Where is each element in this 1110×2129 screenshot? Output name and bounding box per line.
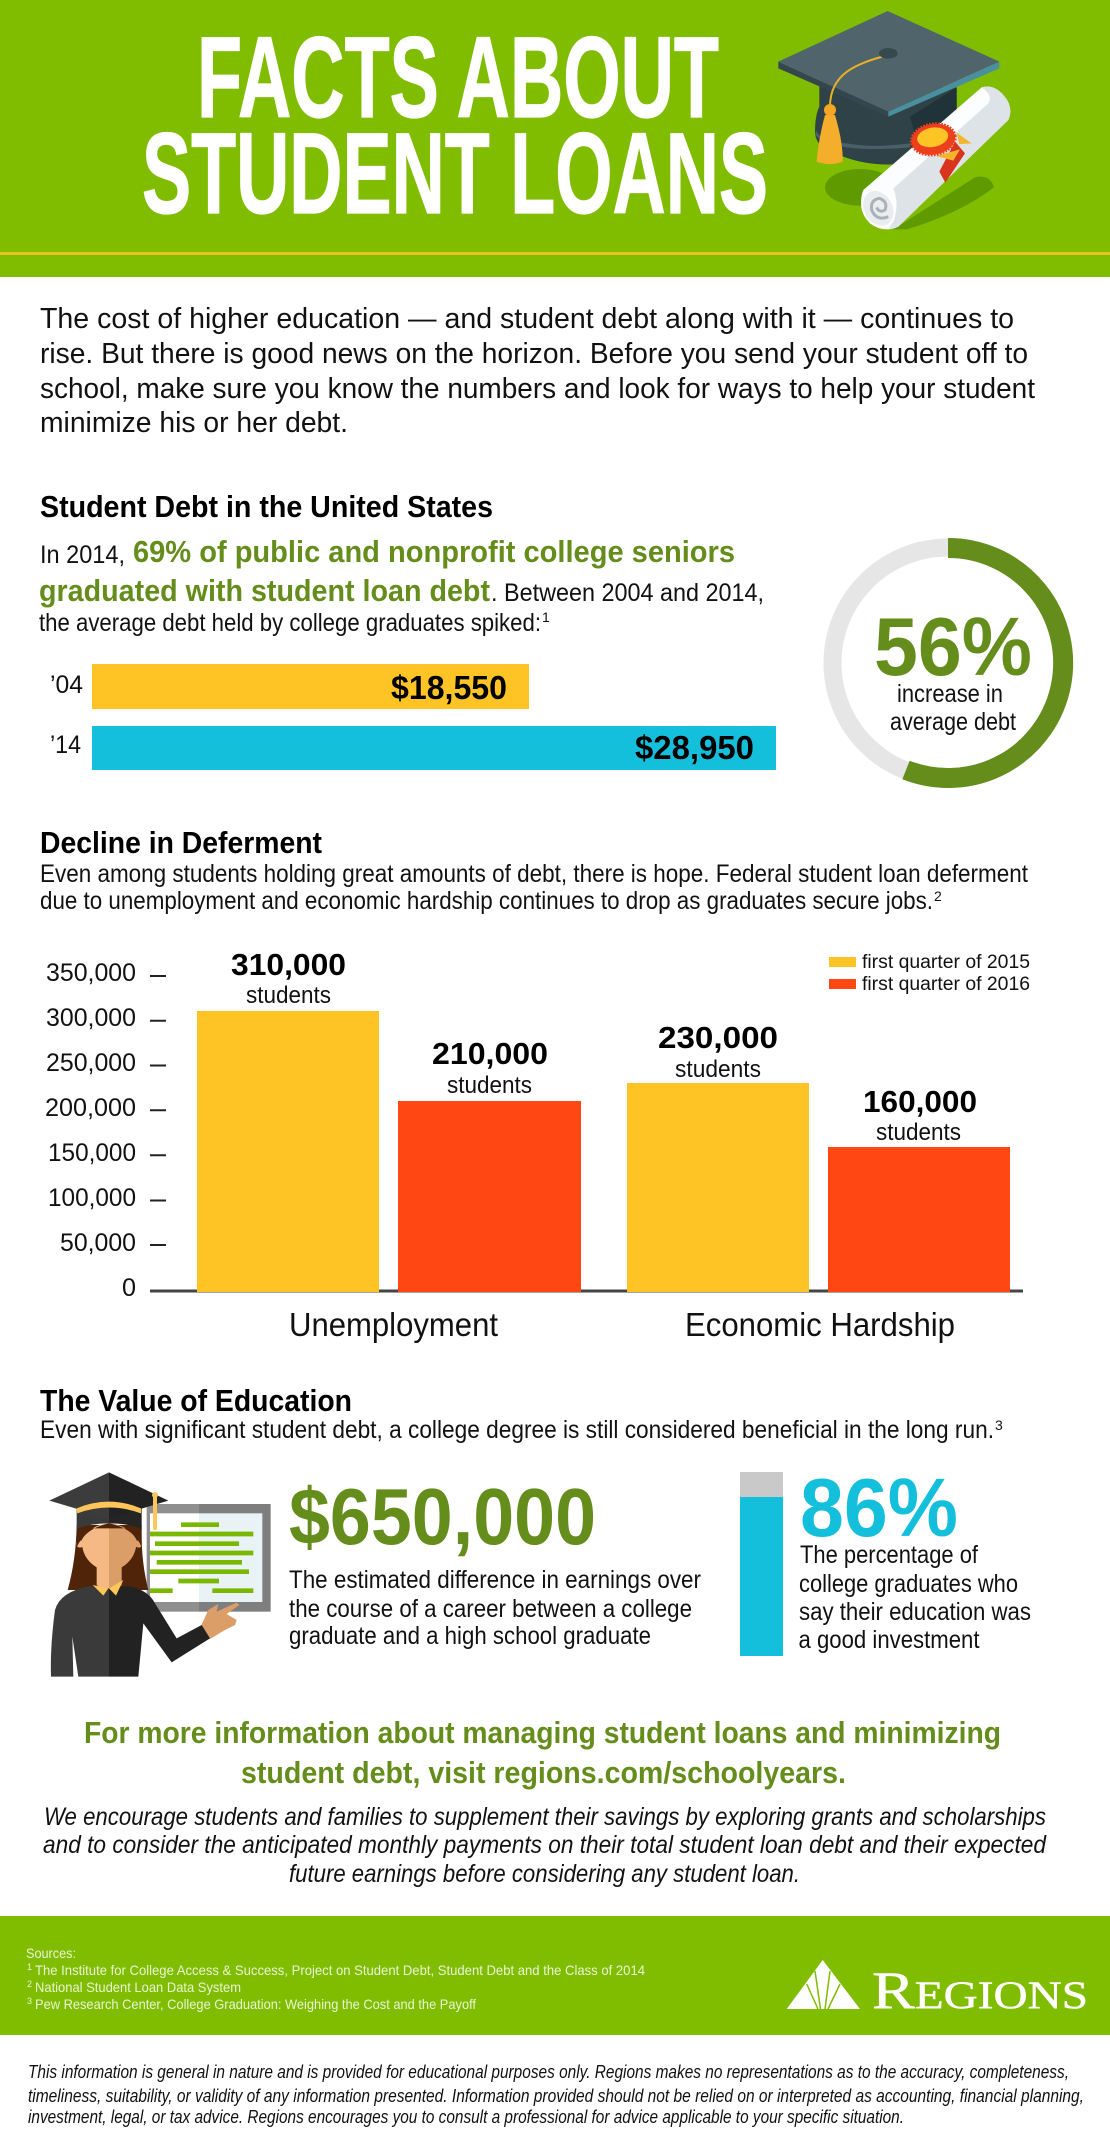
logo: Regions: REGIONS bbox=[872, 1962, 1088, 2020]
bar: 2004 debt: $18,550 bbox=[391, 669, 507, 706]
sources: 2 bbox=[27, 1979, 32, 1989]
donut: 56% increase: increase in bbox=[897, 680, 1003, 708]
stat: 86% bbox=[798, 1461, 1031, 1654]
bar: 2014 debt: ’14 bbox=[50, 731, 81, 759]
donut: 56% increase bbox=[832, 548, 1064, 778]
bar: unemployment 2016 bbox=[398, 1036, 581, 1292]
student debt text block: 69% of public and nonprofit college seniors bbox=[133, 534, 735, 569]
y axis labels and ticks: 100,000 bbox=[48, 1184, 136, 1212]
bar chart: deferment bbox=[45, 947, 1030, 1343]
title bbox=[142, 14, 768, 238]
progress bar: 86% bbox=[740, 1472, 783, 1656]
bar: unemployment 2016: students bbox=[447, 1072, 532, 1099]
intro paragraph: minimize his or her debt. bbox=[40, 407, 348, 439]
deferment text block: due to unemployment and economic hardship continues to drop as graduates secure jobs. bbox=[40, 887, 933, 915]
sources: National Student Loan Data System bbox=[35, 1979, 241, 1995]
deferment text block bbox=[40, 860, 1028, 915]
legend: first quarter of 2015 bbox=[862, 952, 1030, 973]
bar: hardship 2015 bbox=[627, 1020, 809, 1292]
disclaimer bbox=[28, 2062, 1084, 2127]
intro paragraph: The cost of higher education — and student debt along with it — continues to bbox=[40, 303, 1014, 335]
bar: unemployment 2015: 310,000 bbox=[231, 947, 346, 982]
student debt text block: In 2014, bbox=[40, 541, 125, 569]
legend bbox=[829, 952, 1030, 995]
stat: 86%: 86% bbox=[800, 1461, 958, 1554]
bar: unemployment 2016: 210,000 bbox=[432, 1036, 548, 1071]
y axis labels and ticks: 150,000 bbox=[48, 1139, 136, 1167]
y axis labels and ticks: 350,000 bbox=[46, 959, 136, 987]
call to action: student debt, visit regions.com/schoolyears. bbox=[241, 1755, 846, 1790]
stat: $650,000 bbox=[289, 1472, 701, 1650]
stat: 86%: a good investment bbox=[798, 1626, 980, 1654]
stat: 86%: The percentage of bbox=[800, 1541, 978, 1569]
icon: graduate with board bbox=[49, 1472, 271, 1677]
heading: decline in deferment: Decline in Deferment bbox=[40, 825, 322, 860]
intro paragraph bbox=[40, 303, 1035, 439]
bar: hardship 2015: students bbox=[675, 1056, 761, 1083]
bar: unemployment 2015 bbox=[197, 947, 379, 1292]
category labels: Unemployment bbox=[289, 1306, 498, 1343]
y axis labels and ticks bbox=[45, 959, 166, 1302]
bar: 2014 debt: $28,950 bbox=[635, 729, 754, 766]
student debt text block: . Between 2004 and 2014, bbox=[491, 579, 764, 607]
bar: hardship 2016 bbox=[828, 1084, 1010, 1292]
sources: The Institute for College Access & Success, Project on Student Debt, Student Debt and the Class of 2014 bbox=[35, 1962, 645, 1978]
sources bbox=[26, 1945, 645, 2012]
student debt text block: graduated with student loan debt bbox=[39, 573, 490, 608]
donut: 56% increase: average debt bbox=[890, 708, 1016, 736]
header banner bbox=[0, 0, 1110, 277]
intro paragraph: rise. But there is good news on the horizon. Before you send your student off to bbox=[40, 338, 1028, 370]
sources: Sources: bbox=[26, 1945, 76, 1961]
intro paragraph: school, make sure you know the numbers and look for ways to help your student bbox=[40, 373, 1035, 405]
y axis labels and ticks: 300,000 bbox=[46, 1004, 136, 1032]
title: STUDENT LOANS bbox=[142, 110, 768, 238]
y axis labels and ticks: 0 bbox=[122, 1274, 136, 1302]
heading: value of education: The Value of Education bbox=[40, 1383, 352, 1418]
legend: first quarter of 2016 bbox=[862, 974, 1030, 995]
bar: 2004 debt: ’04 bbox=[50, 671, 83, 699]
student debt text block: 1 bbox=[542, 609, 550, 625]
y axis labels and ticks: 50,000 bbox=[60, 1229, 136, 1257]
heading: student debt: Student Debt in the United States bbox=[40, 489, 493, 524]
category labels bbox=[289, 1306, 955, 1343]
category labels: Economic Hardship bbox=[685, 1306, 955, 1343]
stat: 86%: college graduates who bbox=[799, 1570, 1018, 1598]
sources: 3 bbox=[27, 1996, 32, 2006]
sources: Pew Research Center, College Graduation: Weighing the Cost and the Payoff bbox=[35, 1996, 476, 2012]
encouragement note bbox=[43, 1803, 1047, 1888]
student debt text block bbox=[39, 534, 764, 637]
student debt text block: the average debt held by college graduates spiked: bbox=[39, 609, 541, 637]
stat: $650,000: graduate and a high school graduate bbox=[289, 1622, 651, 1650]
encouragement note: future earnings before considering any student loan. bbox=[289, 1860, 800, 1888]
footer band bbox=[0, 1916, 1110, 2035]
stat: $650,000: The estimated difference in earnings over bbox=[289, 1566, 701, 1594]
stat: $650,000: $650,000 bbox=[289, 1472, 596, 1561]
stat: $650,000: the course of a career between a college bbox=[289, 1595, 692, 1623]
call to action bbox=[84, 1715, 1001, 1790]
value text block: Even with significant student debt, a college degree is still considered beneficial in the long run. bbox=[40, 1416, 994, 1444]
donut: 56% increase: 56% bbox=[874, 600, 1032, 693]
deferment text block: Even among students holding great amounts of debt, there is hope. Federal student loan deferment bbox=[40, 860, 1028, 888]
logo: Regions bbox=[787, 1960, 1088, 2020]
sources: 1 bbox=[27, 1962, 32, 1972]
icon: graduation cap and diploma bbox=[778, 11, 1010, 233]
bar: hardship 2016: students bbox=[876, 1119, 961, 1146]
stat: 86%: say their education was bbox=[799, 1598, 1031, 1626]
deferment text block: 2 bbox=[934, 888, 942, 904]
bar: hardship 2016: 160,000 bbox=[863, 1084, 977, 1119]
title: FACTS ABOUT bbox=[197, 14, 719, 142]
y axis labels and ticks: 250,000 bbox=[46, 1049, 136, 1077]
bar: hardship 2015: 230,000 bbox=[658, 1020, 778, 1055]
call to action: For more information about managing student loans and minimizing bbox=[84, 1715, 1001, 1750]
bar: unemployment 2015: students bbox=[246, 982, 331, 1009]
value text block: 3 bbox=[995, 1417, 1003, 1433]
y axis labels and ticks: 200,000 bbox=[45, 1094, 136, 1122]
bar: 2014 debt bbox=[50, 726, 776, 770]
bar: 2004 debt bbox=[50, 664, 529, 709]
disclaimer: investment, legal, or tax advice. Regions encourages you to consult a professional for advice applicable to your specific situation. bbox=[28, 2107, 904, 2127]
